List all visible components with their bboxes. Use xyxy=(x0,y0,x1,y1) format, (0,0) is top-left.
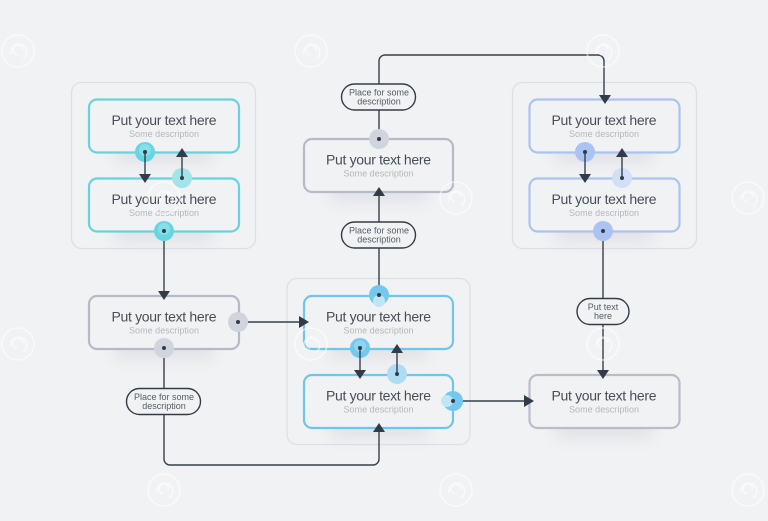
connector: middle group to bottom right xyxy=(454,400,526,402)
box: middle top standalone: Put your text here xyxy=(326,152,431,168)
box: left top: Some description xyxy=(129,129,199,139)
connector: middle vertical xyxy=(378,192,380,296)
panel: left group xyxy=(72,82,256,248)
box: middle top standalone: Some description xyxy=(344,168,414,178)
pill label: left: Place for some xyxy=(134,392,194,402)
box: right standalone xyxy=(530,375,680,428)
box shadows xyxy=(115,137,653,438)
connector: right group to bottom right xyxy=(602,231,604,371)
box: right bottom: Some description xyxy=(569,208,639,218)
panel: middle group xyxy=(287,278,470,444)
pill label: middle: description xyxy=(357,234,401,244)
box: middle group top: Some description xyxy=(344,326,414,336)
arrowheads xyxy=(139,95,628,432)
box: left bottom: Put your text here xyxy=(112,191,217,207)
box: left bottom: Some description xyxy=(129,208,199,218)
box: middle group bottom xyxy=(304,375,453,428)
box: right standalone: Put your text here xyxy=(552,388,657,404)
pill label: middle xyxy=(342,222,416,248)
pill label: left xyxy=(126,388,200,414)
pill label: right: here xyxy=(594,311,612,321)
box: middle group bottom: Some description xyxy=(344,404,414,414)
box: left top: Put your text here xyxy=(112,112,217,128)
pill label: top: description xyxy=(357,96,401,106)
connector: box 3 to group 2 bottom xyxy=(164,348,379,465)
pill label: right: Put text xyxy=(588,302,619,312)
short arrows between boxes xyxy=(143,137,624,403)
box: left standalone xyxy=(89,296,239,349)
box: middle top standalone xyxy=(304,139,453,192)
pill label: right xyxy=(577,298,629,324)
box: right bottom: Put your text here xyxy=(552,191,657,207)
box: right top: Some description xyxy=(569,129,639,139)
pill label: top: Place for some xyxy=(349,88,409,98)
box: left standalone: Put your text here xyxy=(112,308,217,324)
box: middle group top xyxy=(304,296,453,349)
box: left top xyxy=(89,100,239,152)
connector: box 3 to middle group xyxy=(238,321,300,323)
box: right top: Put your text here xyxy=(552,112,657,128)
connector: left group to box 3 xyxy=(163,231,165,292)
pill label: top xyxy=(342,84,416,110)
box: left standalone: Some description xyxy=(129,326,199,336)
box: middle group bottom: Put your text here xyxy=(326,388,431,404)
box: right bottom xyxy=(530,178,680,232)
box: right top xyxy=(530,100,680,152)
box: right standalone: Some description xyxy=(569,404,639,414)
pill label: left: description xyxy=(142,401,186,411)
pill label: middle: Place for some xyxy=(349,226,409,236)
connector: top route to right group xyxy=(379,55,604,139)
node circles xyxy=(135,129,632,411)
box: left bottom xyxy=(89,178,239,232)
panel: right group xyxy=(512,82,696,248)
box: middle group top: Put your text here xyxy=(326,308,431,324)
